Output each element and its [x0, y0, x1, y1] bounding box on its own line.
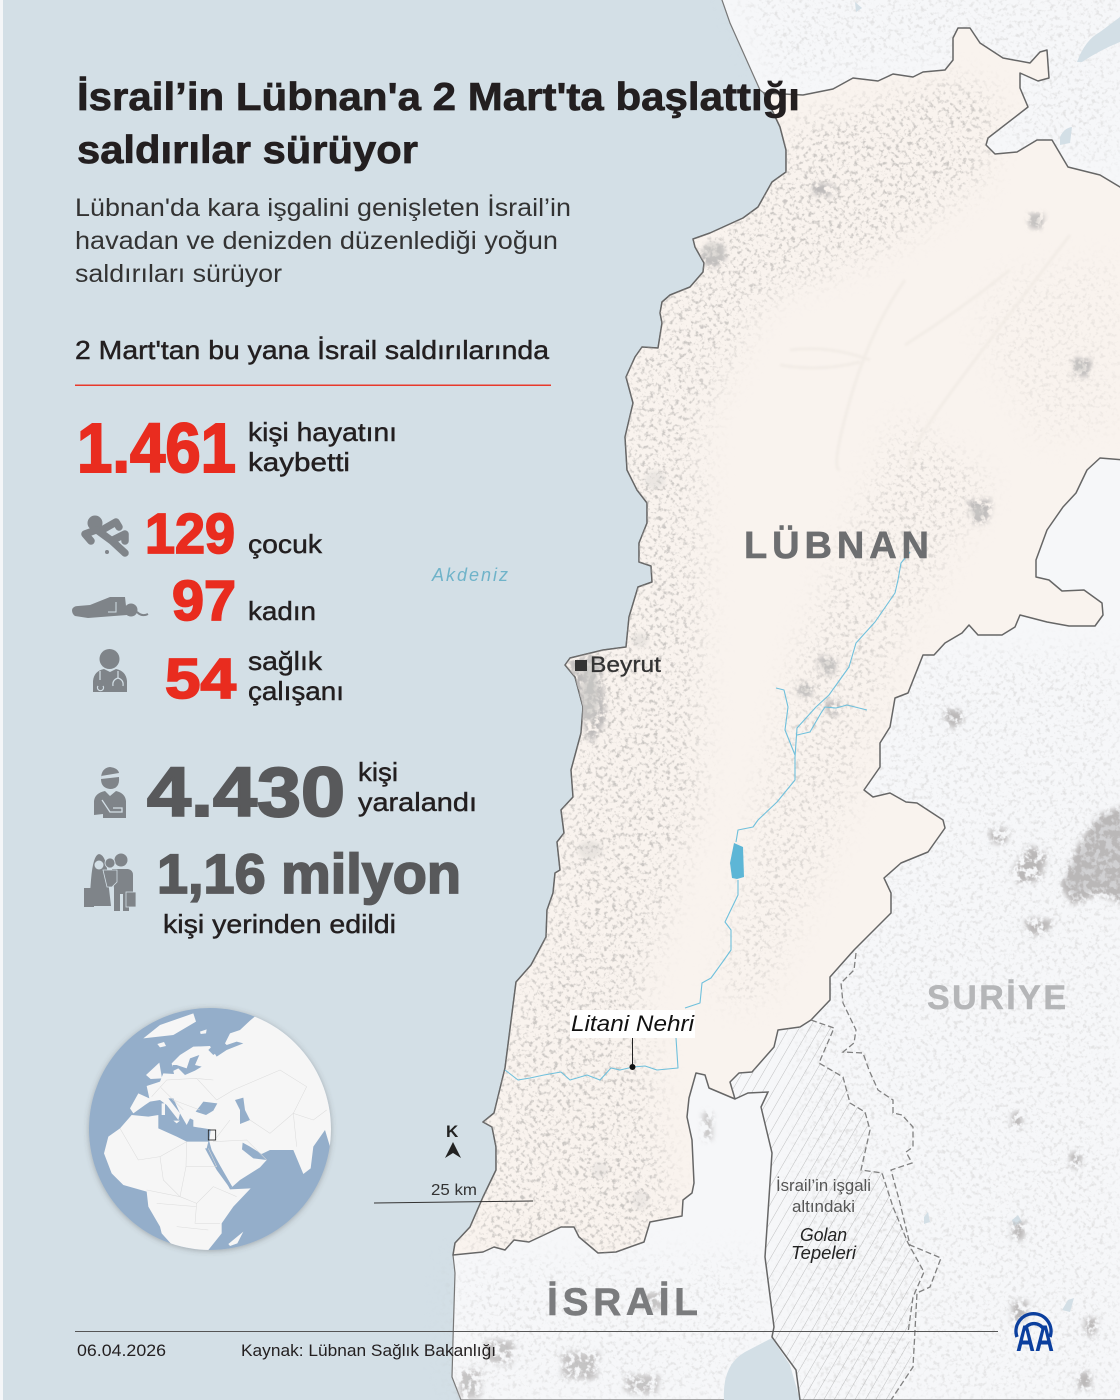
label: LÜBNAN: LÜBNAN	[744, 524, 929, 567]
subtitle: saldırıları sürüyor	[75, 260, 282, 288]
outer dashed line	[841, 953, 941, 1400]
stat: killed: kaybetti	[248, 447, 350, 477]
icon: injured person	[94, 767, 126, 818]
stat: displaced: 1,16 milyon	[157, 842, 461, 905]
title: İsrail’in Lübnan'a 2 Mart'ta başlattığı	[77, 76, 800, 119]
globe land	[104, 1013, 347, 1250]
stat: killed: kişi hayatını	[248, 417, 397, 447]
terrain ridges	[908, 444, 918, 468]
stat: women: kadın	[248, 596, 316, 626]
subtitle: havadan ve denizden düzenlediği yoğun	[75, 227, 558, 255]
section heading: 2 Mart'tan bu yana İsrail saldırılarında	[75, 335, 550, 365]
Lebanon	[453, 28, 1120, 1255]
label: Golan Heights: İsrail’in işgali	[776, 1176, 871, 1195]
stat: displaced	[84, 842, 461, 939]
label: Golan Heights: altındaki	[792, 1197, 855, 1216]
stat: children	[85, 502, 323, 566]
callout: Litani Nehri	[570, 1010, 695, 1070]
icon: fallen child	[85, 516, 125, 554]
Israel–Golan border	[735, 1092, 800, 1400]
stat: women: 97	[172, 569, 236, 633]
hatch	[730, 1020, 924, 1400]
stat: wounded: kişi	[358, 757, 398, 787]
subtitle	[75, 193, 571, 288]
label: İSRAİL: İSRAİL	[547, 1281, 698, 1324]
Qaraoun lake	[730, 843, 744, 879]
stat: women	[72, 569, 316, 633]
north arrow	[445, 1122, 461, 1158]
stat: wounded	[94, 753, 477, 831]
urban areas	[568, 183, 1092, 745]
label: Beyrut: Beyrut	[590, 652, 661, 677]
globe borders	[120, 1070, 327, 1230]
Sea of Galilee	[724, 1338, 800, 1400]
Israel urban areas	[458, 1112, 712, 1398]
label: Golan Heights	[776, 1176, 871, 1263]
globe inland seas	[172, 1047, 250, 1187]
scale bar: 25 km	[431, 1182, 477, 1199]
locator globe	[89, 1008, 347, 1250]
stat: health workers	[93, 646, 344, 711]
footer: 06.04.2026	[77, 1341, 166, 1360]
label: Akdeniz: Akdeniz	[431, 565, 508, 585]
stat: health workers: 54	[165, 647, 236, 711]
label: SURİYE: SURİYE	[927, 979, 1066, 1017]
label: Golan Heights: Golan	[800, 1225, 847, 1245]
neighbouring land texture	[455, 0, 1120, 1400]
lakes	[855, 2, 1120, 1312]
stat: killed	[77, 409, 397, 487]
stat: killed: 1.461	[77, 409, 236, 487]
Syria urban areas	[1062, 808, 1120, 900]
AA logo: AA	[1016, 1318, 1054, 1359]
stat: health workers: çalışanı	[248, 676, 344, 706]
stat: children: çocuk	[248, 529, 323, 559]
icon: lying woman	[72, 597, 148, 618]
stat: wounded: yaralandı	[358, 787, 477, 817]
north arrow: K	[446, 1122, 459, 1141]
Lebanon texture	[470, 80, 1000, 1260]
icon: displaced family	[84, 854, 136, 911]
Litani river	[505, 552, 910, 1080]
footer	[75, 1331, 998, 1360]
AA logo	[1016, 1314, 1054, 1359]
label: Golan Heights: Tepeleri	[791, 1243, 857, 1263]
map of the region	[452, 0, 1120, 1400]
subtitle: Lübnan'da kara işgalini genişleten İsrail’in	[75, 193, 571, 222]
Golan Heights occupied area	[730, 953, 941, 1400]
icon: doctor	[93, 649, 127, 692]
stat: wounded: 4.430	[147, 753, 345, 831]
location marker	[208, 1130, 216, 1140]
footer: Kaynak: Lübnan Sağlık Bakanlığı	[241, 1341, 496, 1360]
neighbouring land	[452, 0, 1120, 1400]
inner dashed line	[811, 1020, 924, 1333]
callout: Litani Nehri: Litani Nehri	[571, 1011, 695, 1036]
stat: health workers: sağlık	[248, 646, 323, 676]
stat: displaced: kişi yerinden edildi	[163, 909, 396, 939]
title	[77, 76, 800, 172]
stat: children: 129	[145, 502, 235, 566]
title: saldırılar sürüyor	[77, 129, 418, 172]
